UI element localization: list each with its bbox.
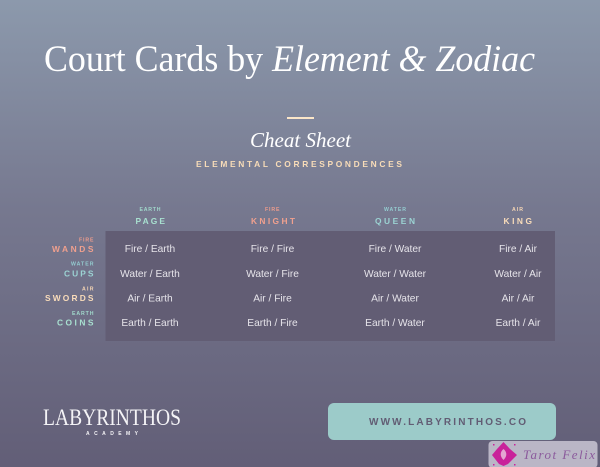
website button: WWW.LABYRINTHOS.CO	[369, 417, 526, 428]
row: coins: Earth / Fire	[247, 318, 298, 329]
row: swords: Air / Air	[502, 294, 535, 304]
row: cups	[120, 269, 542, 280]
row: coins: Earth / Water	[365, 318, 425, 329]
row: wands: Fire / Water	[369, 244, 422, 255]
column header: queen	[375, 207, 415, 226]
column header: knight	[251, 207, 296, 226]
icon: lotus diamond	[492, 442, 517, 466]
logo: labyrinthos academy: ACADEMY	[86, 431, 139, 437]
column header: queen: WATER	[384, 207, 406, 213]
row header: wands: WANDS	[52, 244, 94, 254]
row: swords: Air / Fire	[253, 294, 292, 304]
watermark: tarot felix: Tarot Felix	[523, 447, 595, 462]
row header: swords	[45, 286, 94, 303]
column header: king	[504, 207, 532, 226]
logo: labyrinthos academy	[43, 405, 181, 437]
row header: coins: EARTH	[72, 311, 94, 317]
row: coins: Earth / Earth	[121, 318, 179, 329]
column header: page: PAGE	[136, 216, 165, 226]
row: cups: Water / Earth	[120, 269, 180, 280]
column header: knight: FIRE	[265, 207, 280, 213]
row headers	[45, 238, 94, 328]
row header: cups: CUPS	[64, 268, 94, 278]
row: wands	[125, 244, 538, 255]
row header: cups: WATER	[71, 262, 94, 268]
row header: swords: SWORDS	[45, 293, 94, 303]
row: cups: Water / Fire	[246, 269, 299, 280]
column header: king: AIR	[512, 207, 523, 213]
row: swords	[127, 294, 535, 304]
column header: knight: KNIGHT	[251, 216, 296, 226]
row: wands: Fire / Fire	[251, 244, 295, 255]
column header: page	[136, 207, 165, 226]
row header: coins	[57, 311, 94, 328]
column header: queen: QUEEN	[375, 216, 415, 226]
row header: swords: AIR	[82, 286, 94, 292]
column headers	[136, 207, 532, 226]
column header: page: EARTH	[140, 207, 161, 213]
row: cups: Water / Air	[494, 269, 542, 280]
subheading: elemental correspondences: ELEMENTAL CORRESPONDENCES	[196, 159, 402, 169]
row header: wands	[52, 238, 94, 254]
logo: labyrinthos academy: LABYRINTHOS	[43, 405, 181, 430]
row: swords: Air / Water	[371, 294, 419, 304]
divider accent	[287, 117, 314, 119]
row: swords: Air / Earth	[127, 294, 173, 304]
website button	[328, 403, 556, 440]
row header: cups	[64, 262, 94, 278]
subtitle: cheat sheet: Cheat Sheet	[250, 128, 352, 152]
watermark: tarot felix	[488, 441, 598, 467]
row: coins	[121, 318, 541, 329]
table panel	[106, 231, 555, 341]
row: wands: Fire / Earth	[125, 244, 175, 255]
column header: king: KING	[504, 216, 532, 226]
row header: wands: FIRE	[79, 238, 94, 244]
title: Court Cards by Element & Zodiac	[44, 39, 536, 80]
row header: coins: COINS	[57, 318, 94, 328]
row: coins: Earth / Air	[496, 318, 541, 329]
row: cups: Water / Water	[364, 269, 427, 280]
row: wands: Fire / Air	[499, 244, 538, 255]
